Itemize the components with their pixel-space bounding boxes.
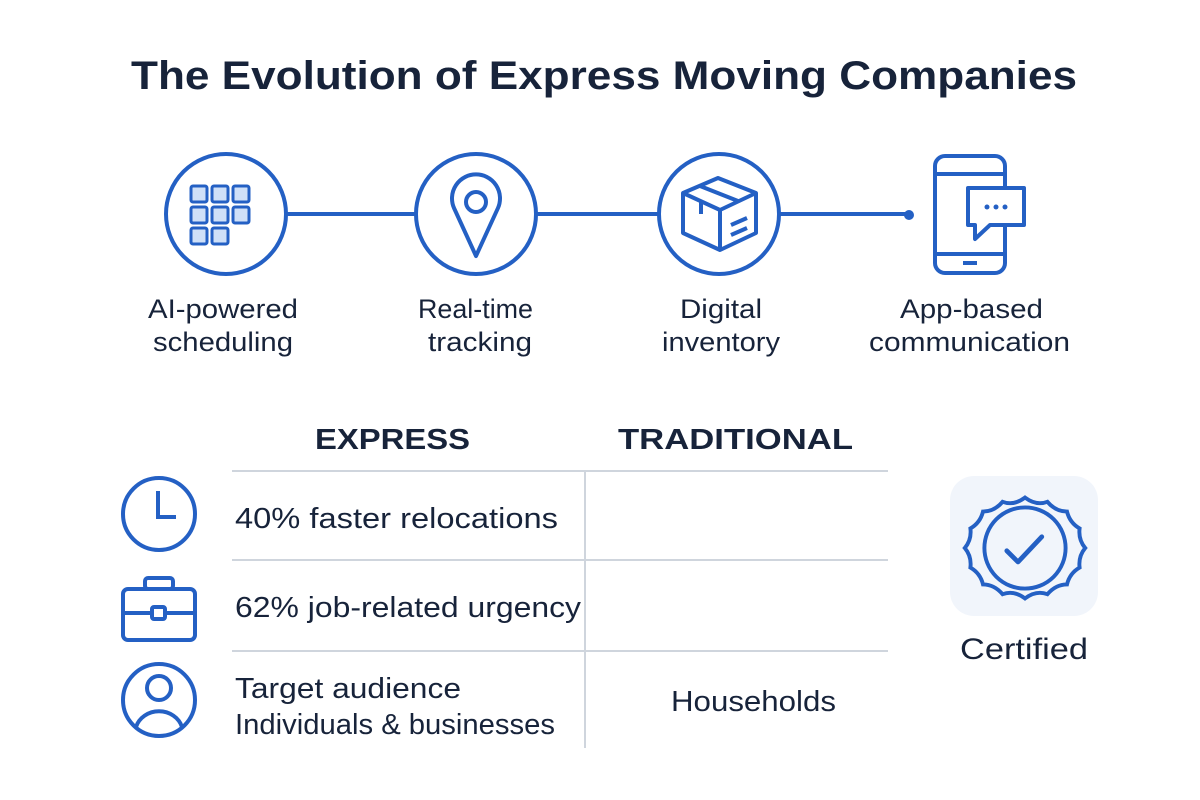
- timeline labels: tracking: [428, 327, 532, 357]
- icon: location pin: [416, 154, 536, 274]
- table headers: TRADITIONAL: [618, 424, 853, 456]
- table headers: [315, 424, 853, 456]
- table headers: EXPRESS: [315, 424, 470, 456]
- icon: clock: [123, 478, 195, 550]
- table rows text: 40% faster relocations: [235, 503, 558, 535]
- icon: briefcase: [123, 578, 195, 640]
- timeline labels: communication: [869, 327, 1070, 357]
- timeline labels: Real-time: [418, 294, 533, 324]
- timeline labels: AI-powered: [148, 294, 298, 324]
- timeline connector line: [286, 210, 914, 220]
- certified badge: [950, 476, 1098, 616]
- timeline labels: Digital: [680, 294, 762, 324]
- table grid: [232, 471, 888, 748]
- table rows text: Individuals & businesses: [235, 709, 555, 741]
- table rows text: Households: [671, 686, 836, 718]
- icon: person: [123, 664, 195, 736]
- table rows text: [235, 503, 836, 741]
- icon: phone with chat: [935, 156, 1024, 273]
- table rows text: 62% job-related urgency: [235, 592, 582, 624]
- timeline labels: scheduling: [153, 327, 293, 357]
- title: The Evolution of Express Moving Companies: [131, 54, 1077, 98]
- timeline labels: [148, 294, 1070, 357]
- icon: box inventory: [659, 154, 779, 274]
- timeline labels: App-based: [900, 294, 1043, 324]
- table rows text: Target audience: [235, 673, 461, 705]
- timeline labels: inventory: [662, 327, 781, 357]
- certified label: Certified: [960, 633, 1088, 666]
- icon: AI scheduling grid: [166, 154, 286, 274]
